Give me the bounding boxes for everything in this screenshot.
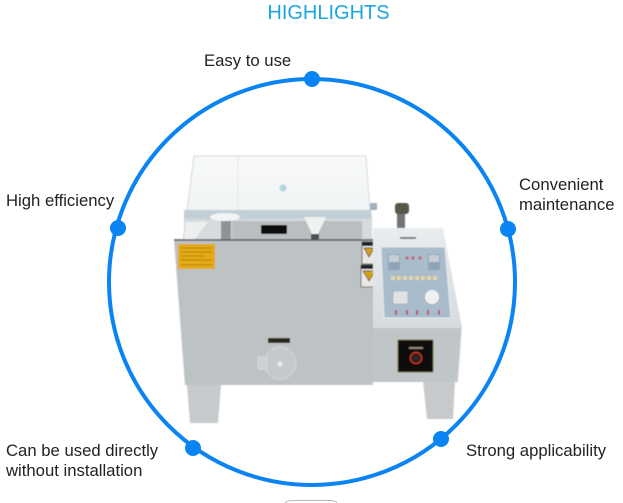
title: HIGHLIGHTS [267, 2, 390, 24]
label: high efficiency: High efficiency [6, 191, 115, 210]
yellow warning label [178, 244, 215, 269]
label: convenient maintenance: maintenance [519, 195, 615, 214]
highlight ring [109, 79, 515, 485]
gauge on stem [395, 203, 409, 228]
warning stickers [361, 242, 376, 287]
black power switch box [398, 340, 433, 372]
label: strong applicability: Strong applicability [466, 441, 607, 460]
control panel [381, 247, 451, 318]
label: convenient maintenance: Convenient [519, 175, 604, 194]
label: can be used directly without installation: without installation [5, 461, 142, 480]
main cabinet [174, 240, 377, 385]
nameplate [268, 338, 290, 343]
left leg [187, 385, 221, 423]
label: easy to use: Easy to use [204, 51, 291, 70]
transparent lid [183, 156, 377, 240]
right leg [423, 381, 455, 419]
lower frame edge [285, 500, 337, 503]
label: can be used directly without installation: Can be used directly [6, 441, 159, 460]
control cabinet [373, 228, 462, 382]
round drain door [258, 347, 296, 379]
ring markers [110, 71, 516, 456]
salt spray test chamber [174, 156, 462, 423]
